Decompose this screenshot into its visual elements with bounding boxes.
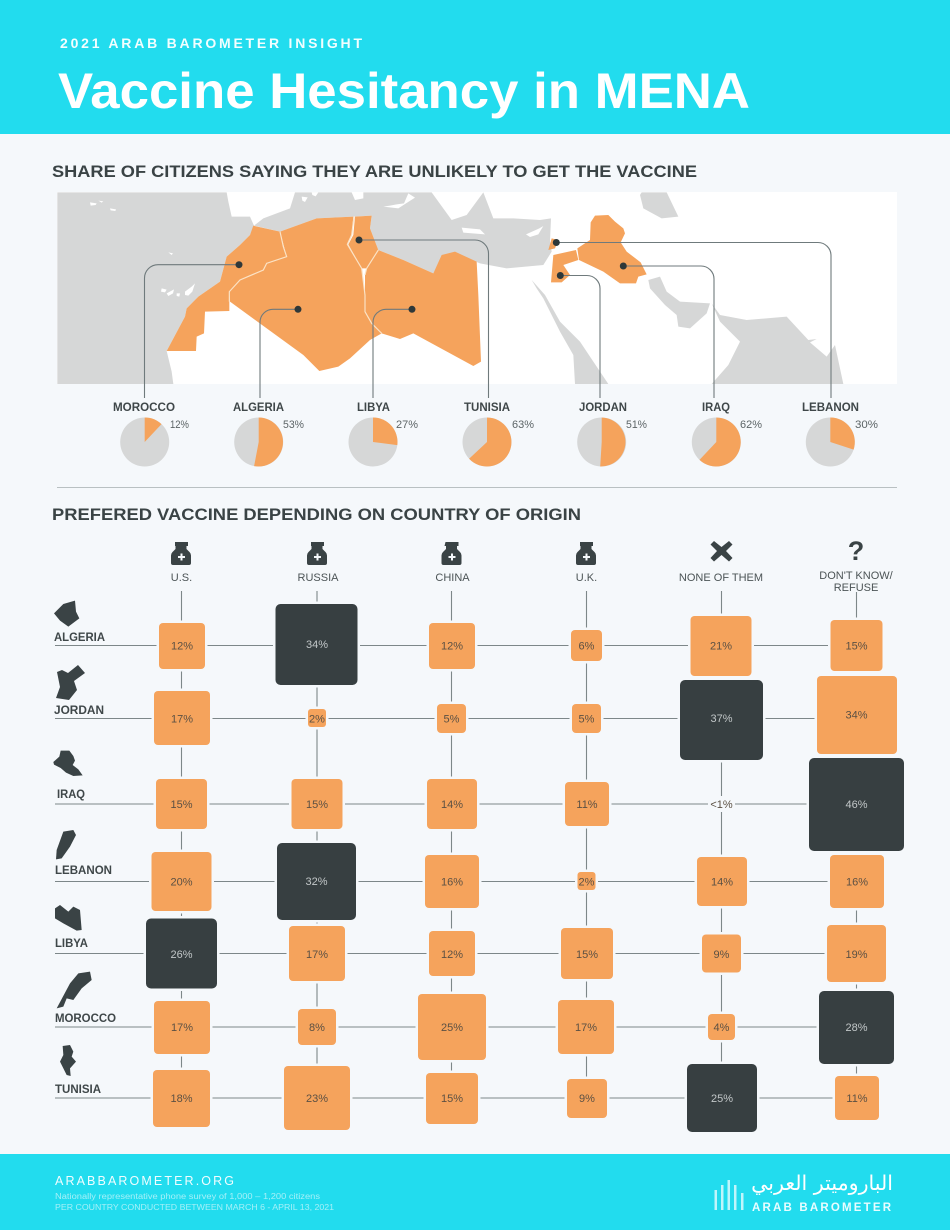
cell: Morocco U.K. 17% [558,1000,614,1054]
cell: Tunisia don't know 11% [835,1076,879,1120]
cell: Iraq Russia 15% [292,779,342,829]
row label: Libya [55,905,88,950]
cell: Algeria Russia 34% [276,604,358,685]
map [57,192,897,384]
cell: Lebanon don't know 16% [830,855,884,908]
leader lines [144,236,831,398]
pie: Lebanon 30%: 30% [855,419,878,431]
footer methodology note: Nationally representative phone survey of 1,000 – 1,200 citizens [55,1192,320,1201]
cell: Algeria don't know 15%: 15% [845,640,868,652]
cell: Algeria U.K. 6% [571,630,602,661]
footer methodology note: PER COUNTRY CONDUCTED BETWEEN MARCH 6 - APRIL 13, 2021 [55,1203,335,1212]
cell: Algeria U.S. 12% [159,623,205,669]
cell: Iraq don't know 46%: 46% [845,799,868,811]
cell: Jordan China 5% [437,704,466,733]
cell: Lebanon China 16% [425,855,479,908]
footer methodology note [55,1192,335,1212]
pie: Algeria 53% [233,402,304,466]
cell: Iraq China 14%: 14% [441,799,463,811]
heading: share unlikely: SHARE OF CITIZENS SAYING THEY ARE UNLIKELY TO GET THE VACCINE [52,163,697,181]
cell: Morocco U.K. 17%: 17% [575,1022,597,1034]
cell: Iraq don't know 46% [809,758,904,851]
cell: Jordan Russia 2% [308,709,326,727]
cell: Iraq U.S. 15%: 15% [170,799,193,811]
pie: Jordan 51% [577,402,647,467]
cell: Algeria U.K. 6%: 6% [579,640,595,652]
row label: Lebanon [55,830,112,877]
cell: Libya none 9% [702,934,741,972]
cell: Morocco none 4% [708,1014,735,1040]
column header: None of them: NONE OF THEM [679,572,763,584]
cell: Morocco don't know 28%: 28% [845,1022,868,1034]
pie: Iraq 62% [692,402,762,466]
cell: Tunisia China 15%: 15% [441,1093,463,1105]
title: Vaccine Hesitancy in MENA [58,63,750,119]
cell: Tunisia don't know 11%: 11% [846,1093,868,1105]
cell: Libya none 9%: 9% [714,949,730,961]
row label: Jordan [54,665,104,717]
cell: Tunisia U.S. 18%: 18% [170,1093,193,1105]
cell: Libya don't know 19%: 19% [845,949,868,961]
eyebrow heading: 2021 ARAB BAROMETER INSIGHT [60,35,362,51]
column header: U.K.: U.K. [576,572,597,584]
row label: Iraq: IRAQ [57,789,85,801]
column header: None of them [679,541,763,584]
row label: Libya: LIBYA [55,938,88,950]
cell: Jordan U.K. 5%: 5% [579,714,595,726]
cell: Algeria U.S. 12%: 12% [171,640,193,652]
cell: Algeria Russia 34%: 34% [306,639,328,651]
cell: Morocco Russia 8% [298,1009,336,1045]
heading: preferred vaccine: PREFERED VACCINE DEPENDING ON COUNTRY OF ORIGIN [52,506,581,524]
cell: Jordan don't know 34% [817,676,897,754]
cell: Iraq none under 1% [708,796,735,812]
cell: Libya China 12%: 12% [441,949,463,961]
cell: Lebanon none 14% [697,857,747,906]
cell: Lebanon don't know 16%: 16% [846,876,868,888]
column header: U.S.: U.S. [171,572,192,584]
cell: Morocco China 25% [418,994,486,1060]
pie: Libya 27%: 27% [396,419,418,431]
cell: Lebanon U.S. 20%: 20% [170,876,193,888]
pie: Iraq 62%: 62% [740,419,762,431]
cell: Lebanon none 14%: 14% [711,876,733,888]
cell: Jordan none 37% [680,680,763,760]
column header: U.S. [171,542,192,584]
column header: China [435,542,470,584]
pie: Morocco 12% [113,402,189,466]
cell: Libya Russia 17% [289,926,345,981]
cell: Lebanon U.K. 2%: 2% [579,876,595,888]
column header: Russia: RUSSIA [298,572,339,584]
cell: Libya Russia 17%: 17% [306,949,328,961]
footer [0,1154,950,1230]
pie: Tunisia 63% [462,402,534,466]
cell: Morocco none 4%: 4% [714,1022,730,1034]
cell: Algeria none 21% [690,616,752,676]
pie: Lebanon 30% [802,402,878,466]
column header: China: CHINA [435,572,470,584]
cell: Libya U.K. 15% [561,928,613,979]
cell: Jordan don't know 34%: 34% [845,710,868,722]
pie: Morocco 12%: MOROCCO [113,402,175,414]
cell: Tunisia none 25% [687,1064,757,1132]
cell: Iraq Russia 15%: 15% [306,799,328,811]
logo: Arab Barometer [714,1171,893,1214]
column header: Don't know / refuse: ? [848,536,864,566]
cell: Libya U.S. 26% [146,918,217,988]
cell: Tunisia Russia 23% [284,1066,350,1130]
cell: Algeria don't know 15% [830,620,882,671]
pie: Tunisia 63%: TUNISIA [464,402,510,414]
pie: Lebanon 30%: LEBANON [802,402,859,414]
pie: Algeria 53%: 53% [283,419,304,431]
logo: Arab Barometer: ARAB BAROMETER [752,1202,892,1214]
cell: Morocco U.S. 17%: 17% [171,1022,193,1034]
cell: Lebanon Russia 32% [277,843,356,920]
cell: Lebanon Russia 32%: 32% [305,876,328,888]
row label: Tunisia: TUNISIA [55,1084,101,1096]
cell: Jordan China 5%: 5% [444,714,460,726]
cell: Jordan Russia 2%: 2% [309,714,325,726]
cell: Iraq none under 1%: <1% [710,799,733,811]
cell: Lebanon U.S. 20% [152,852,212,911]
cell: Algeria China 12%: 12% [441,640,463,652]
row label: Morocco: MOROCCO [55,1013,116,1025]
cell: Libya U.K. 15%: 15% [576,949,598,961]
cell: Jordan U.K. 5% [572,704,601,733]
cell: Iraq China 14% [427,779,477,829]
row label: Tunisia [55,1045,101,1096]
cell: Lebanon China 16%: 16% [441,876,463,888]
cell: Tunisia none 25%: 25% [711,1093,733,1105]
cell: Jordan none 37%: 37% [710,713,733,725]
pie: Libya 27%: LIBYA [357,402,390,414]
row label: Jordan: JORDAN [54,705,104,717]
cell: Tunisia China 15% [426,1073,478,1124]
column header: Russia [298,542,339,584]
cell: Tunisia U.K. 9% [567,1079,607,1118]
cell: Libya don't know 19% [827,925,886,982]
pie: Tunisia 63%: 63% [512,419,534,431]
cell: Libya U.S. 26%: 26% [170,949,193,961]
cell: Algeria none 21%: 21% [710,640,732,652]
row label: Algeria [54,601,105,644]
cell: Lebanon U.K. 2% [578,872,596,890]
cell: Tunisia U.S. 18% [153,1070,210,1127]
pie: Iraq 62%: IRAQ [702,402,730,414]
pie: Libya 27% [348,402,418,466]
pie: Jordan 51%: JORDAN [579,402,627,414]
cell: Morocco Russia 8%: 8% [309,1022,325,1034]
cell: Morocco China 25%: 25% [441,1022,463,1034]
header banner [0,0,950,134]
cell: Libya China 12% [429,931,475,976]
pie: Morocco 12%: 12% [170,419,189,431]
cell: Tunisia U.K. 9%: 9% [579,1093,595,1105]
row label: Iraq [53,751,85,801]
cell: Tunisia Russia 23%: 23% [306,1093,328,1105]
column header: U.K. [576,542,597,584]
cell: Morocco U.S. 17% [154,1001,210,1054]
column header: Don't know / refuse: DON'T KNOW/ [819,570,894,582]
cell: Morocco don't know 28% [819,991,894,1064]
cell: Iraq U.S. 15% [156,779,207,829]
cell: Iraq U.K. 11%: 11% [576,799,598,811]
cell: Jordan U.S. 17% [154,691,210,745]
row label: Morocco [55,972,116,1025]
cell: Iraq U.K. 11% [565,782,609,826]
logo: Arab Barometer: البارومیتر العربي [751,1171,893,1195]
row label: Algeria: ALGERIA [54,632,105,644]
cell: Jordan U.S. 17%: 17% [171,714,193,726]
column header: Don't know / refuse [819,536,894,594]
column header: Don't know / refuse: REFUSE [834,582,878,594]
cell: Algeria China 12% [429,623,475,669]
row label: Lebanon: LEBANON [55,865,112,877]
footer website: ARABBAROMETER.ORG [55,1174,234,1188]
pie: Algeria 53%: ALGERIA [233,402,284,414]
pie: Jordan 51%: 51% [626,419,647,431]
